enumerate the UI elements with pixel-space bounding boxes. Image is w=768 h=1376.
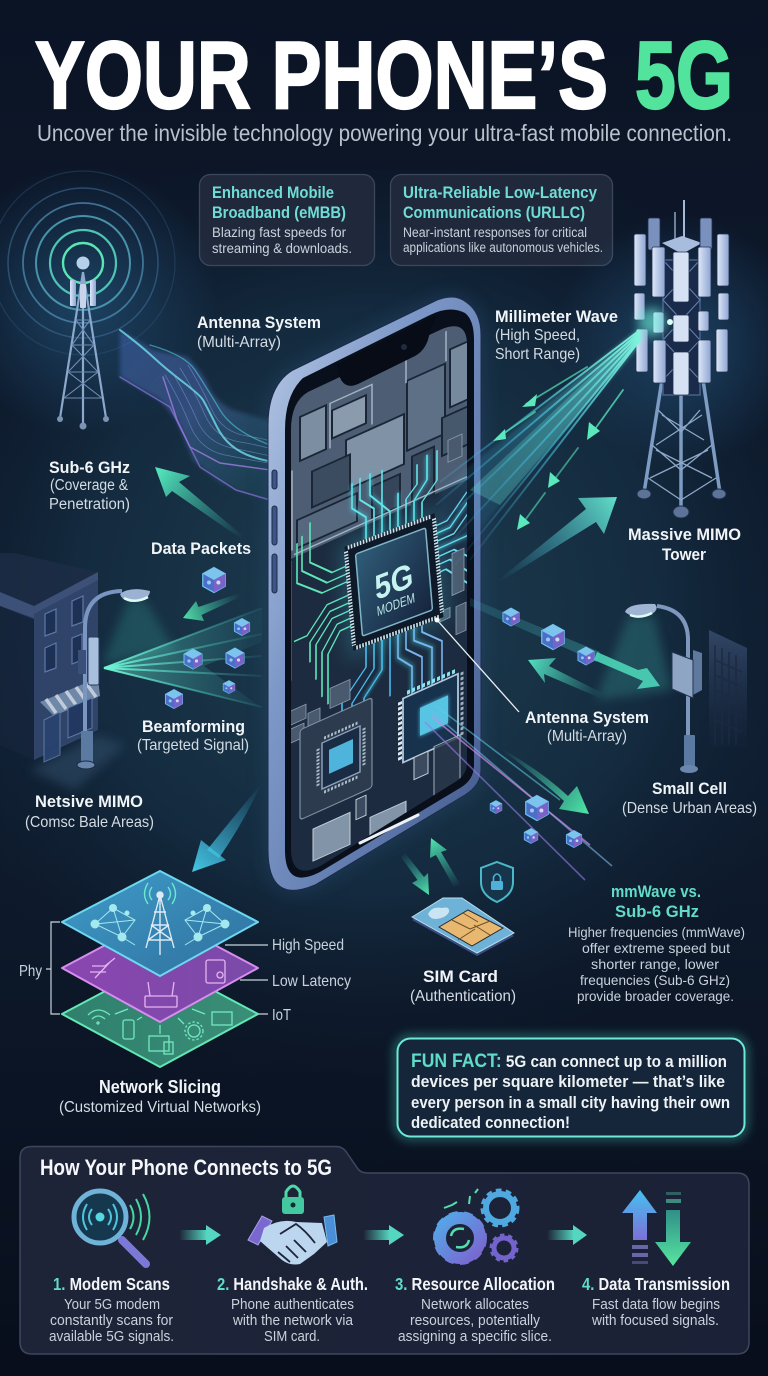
card: eMBB: streaming & downloads.: [212, 240, 352, 256]
icon: shield lock: [481, 862, 513, 902]
label: antenna system top: [197, 313, 321, 351]
title: 5G: [635, 22, 733, 129]
network slicing diagram: High Speed: [272, 937, 344, 954]
icon: gears: [437, 1189, 517, 1261]
step 2: [217, 1274, 368, 1345]
camera: [401, 344, 407, 350]
phone frame: [268, 297, 481, 890]
card: eMBB: Enhanced Mobile: [212, 183, 334, 202]
label: SIM card: [410, 967, 516, 1005]
label: data packets: Data Packets: [151, 539, 251, 558]
text: mmWave vs Sub-6: provide broader coverage.: [577, 988, 734, 1004]
small arrows along beam: [493, 367, 623, 530]
layer: high speed: [62, 871, 258, 976]
step 3: Network allocates: [421, 1296, 529, 1313]
fun fact box: [397, 1038, 745, 1137]
label: sub-6 GHz: Sub-6 GHz: [49, 458, 130, 477]
leader lines and bracket: [46, 922, 268, 1014]
lower right antenna module: [400, 668, 462, 764]
fun fact box: dedicated connection!: [411, 1114, 570, 1132]
label: beamforming: Beamforming: [142, 717, 245, 736]
5G modem chip: MODEM: [376, 589, 416, 619]
icon: SIM card: [412, 898, 514, 956]
card: URLLC: Near-instant responses for critical: [403, 225, 587, 240]
step 4: Fast data flow begins: [592, 1296, 720, 1313]
icon: magnifier: [74, 1191, 150, 1264]
step 1: available 5G signals.: [49, 1328, 174, 1345]
step 3: [395, 1274, 555, 1345]
icon: building and street lamp: [0, 553, 175, 790]
phone: [268, 287, 481, 893]
bottom components: [313, 735, 460, 867]
arrow 2: [363, 1225, 404, 1245]
lattice: [644, 200, 720, 510]
step 3: assigning a specific slice.: [398, 1328, 552, 1345]
label: small cell: (Dense Urban Areas): [622, 800, 757, 817]
label: sub-6 GHz: (Coverage &: [50, 477, 129, 494]
text: mmWave vs Sub-6: frequencies (Sub-6 GHz): [580, 972, 730, 988]
label: SIM card: SIM Card: [423, 967, 498, 986]
phone screen internals: [291, 326, 467, 871]
tower icon: [144, 883, 176, 955]
data packet cubes: [165, 568, 250, 708]
text: mmWave vs Sub-6: [568, 882, 745, 1004]
beams and cubes to lower right: [425, 706, 612, 880]
card: eMBB: Blazing fast speeds for: [212, 224, 346, 240]
fun fact box: FUN FACT: 5G can connect up to a million: [411, 1051, 727, 1072]
arrow: phone to small cell: [470, 598, 660, 689]
label: network slicing: Network Slicing: [99, 1077, 221, 1097]
lower left module: [300, 698, 372, 820]
step 4: 4. Data Transmission: [582, 1274, 730, 1294]
label: netsive MIMO: Netsive MIMO: [35, 792, 143, 811]
step 4: with focused signals.: [591, 1312, 719, 1329]
step 1: Your 5G modem: [64, 1296, 160, 1313]
icon: handshake: [248, 1215, 337, 1264]
step 3: resources, potentially: [410, 1312, 540, 1329]
label: massive MIMO tower: Massive MIMO: [628, 525, 741, 544]
label: millimeter wave: Short Range): [495, 346, 580, 363]
label: massive MIMO tower: Tower: [662, 545, 706, 564]
wave ribbon to phone: [120, 330, 285, 505]
fun fact box: devices per square kilometer — that’s like: [411, 1073, 725, 1091]
label: sub-6 GHz: [49, 458, 130, 513]
label: millimeter wave: [495, 307, 618, 363]
network slicing diagram: [19, 871, 351, 1067]
label: antenna system right: (Multi-Array): [547, 728, 627, 745]
text: mmWave vs Sub-6: offer extreme speed but: [582, 940, 730, 956]
arrow: to massive MIMO: [497, 497, 617, 583]
label: netsive MIMO: (Comsc Bale Areas): [25, 814, 154, 831]
small cell lamp: [596, 604, 747, 773]
card: eMBB: Broadband (eMBB): [212, 203, 346, 222]
antenna panels: [634, 218, 729, 395]
card: URLLC: applications like autonomous vehicles.: [403, 240, 603, 255]
label: small cell: Small Cell: [652, 779, 727, 798]
office building: [709, 630, 747, 748]
step 4: [582, 1274, 730, 1329]
label: antenna system top: Antenna System: [197, 313, 321, 332]
step 1: 1. Modem Scans: [53, 1274, 170, 1294]
icon: lock: [282, 1186, 304, 1214]
label: SIM card: (Authentication): [410, 988, 516, 1005]
label: sub-6 GHz: Penetration): [49, 496, 130, 513]
phone bezel: [285, 309, 474, 878]
arrow: to sub-6: [155, 467, 243, 538]
beamforming fan: [104, 608, 262, 708]
panel: how your phone connects: [20, 1146, 749, 1354]
text: mmWave vs Sub-6: mmWave vs.: [611, 882, 701, 901]
icon: data arrows: [622, 1190, 691, 1266]
step 2: with the network via: [232, 1312, 354, 1329]
icon: sub-6 tower with signal rings: [0, 165, 218, 435]
tower feet: [637, 489, 726, 518]
label: beamforming: [137, 717, 249, 754]
label: small cell: [622, 779, 757, 817]
arrow 3: [547, 1225, 587, 1245]
card: eMBB: [200, 174, 374, 266]
text: mmWave vs Sub-6: Sub-6 GHz: [615, 902, 699, 921]
label: antenna system right: Antenna System: [525, 708, 649, 727]
lower board dark area: [291, 480, 467, 870]
cubes to small cell: [503, 608, 594, 665]
step 2: Phone authenticates: [231, 1296, 354, 1313]
label: network slicing: [59, 1077, 261, 1116]
network slicing diagram: Phy: [19, 963, 42, 980]
small components: [290, 432, 466, 743]
massive MIMO tower: [555, 200, 768, 518]
network slicing diagram: Low Latency: [272, 973, 351, 990]
label: antenna system right: [525, 708, 649, 745]
home bar: [360, 815, 418, 843]
label: millimeter wave: (High Speed,: [495, 327, 580, 344]
network slicing diagram: IoT: [272, 1007, 291, 1024]
panel heading: How Your Phone Connects to 5G: [40, 1155, 332, 1180]
card: URLLC: Communications (URLLC): [403, 203, 585, 222]
5G modem chip: [339, 506, 449, 658]
label: beamforming: (Targeted Signal): [137, 737, 249, 754]
phone glow: [268, 297, 481, 890]
title: YOUR PHONE’S: [35, 22, 608, 129]
step 3: 3. Resource Allocation: [395, 1274, 555, 1294]
5G modem chip: 5G: [373, 556, 415, 608]
notch: [320, 315, 437, 386]
circuit traces: [291, 450, 467, 711]
label: antenna system top: (Multi-Array): [197, 334, 281, 351]
arrow: lower right: [500, 748, 589, 814]
label: millimeter wave: Millimeter Wave: [495, 307, 618, 326]
card: URLLC: [390, 174, 612, 266]
arrow: packets to lamp: [183, 593, 240, 621]
layer: IoT: [62, 962, 258, 1067]
card: URLLC: Ultra-Reliable Low-Latency: [403, 183, 597, 202]
arrow: to network slicing: [192, 783, 262, 872]
upper board panels: [291, 326, 467, 559]
text: mmWave vs Sub-6: Higher frequencies (mmWave): [568, 924, 745, 940]
step 2: 2. Handshake & Auth.: [217, 1274, 368, 1294]
arrows: phone and SIM: [401, 838, 460, 895]
step 2: SIM card.: [264, 1328, 320, 1345]
step 1: constantly scans for: [50, 1312, 173, 1329]
arrow: small cell to phone: [528, 658, 604, 698]
label: netsive MIMO: [25, 792, 154, 831]
fun fact box: every person in a small city having their own: [411, 1094, 730, 1112]
leader line: antenna system right: [434, 618, 519, 712]
millimeter wave beam: [436, 308, 673, 575]
arrow 1: [179, 1225, 221, 1245]
step 1: [49, 1274, 174, 1345]
layer: low latency: [62, 916, 258, 1022]
label: network slicing: (Customized Virtual Networks): [59, 1099, 261, 1116]
text: mmWave vs Sub-6: shorter range, lower: [591, 956, 719, 972]
side buttons: [272, 470, 277, 593]
label: massive MIMO tower: [628, 525, 741, 564]
